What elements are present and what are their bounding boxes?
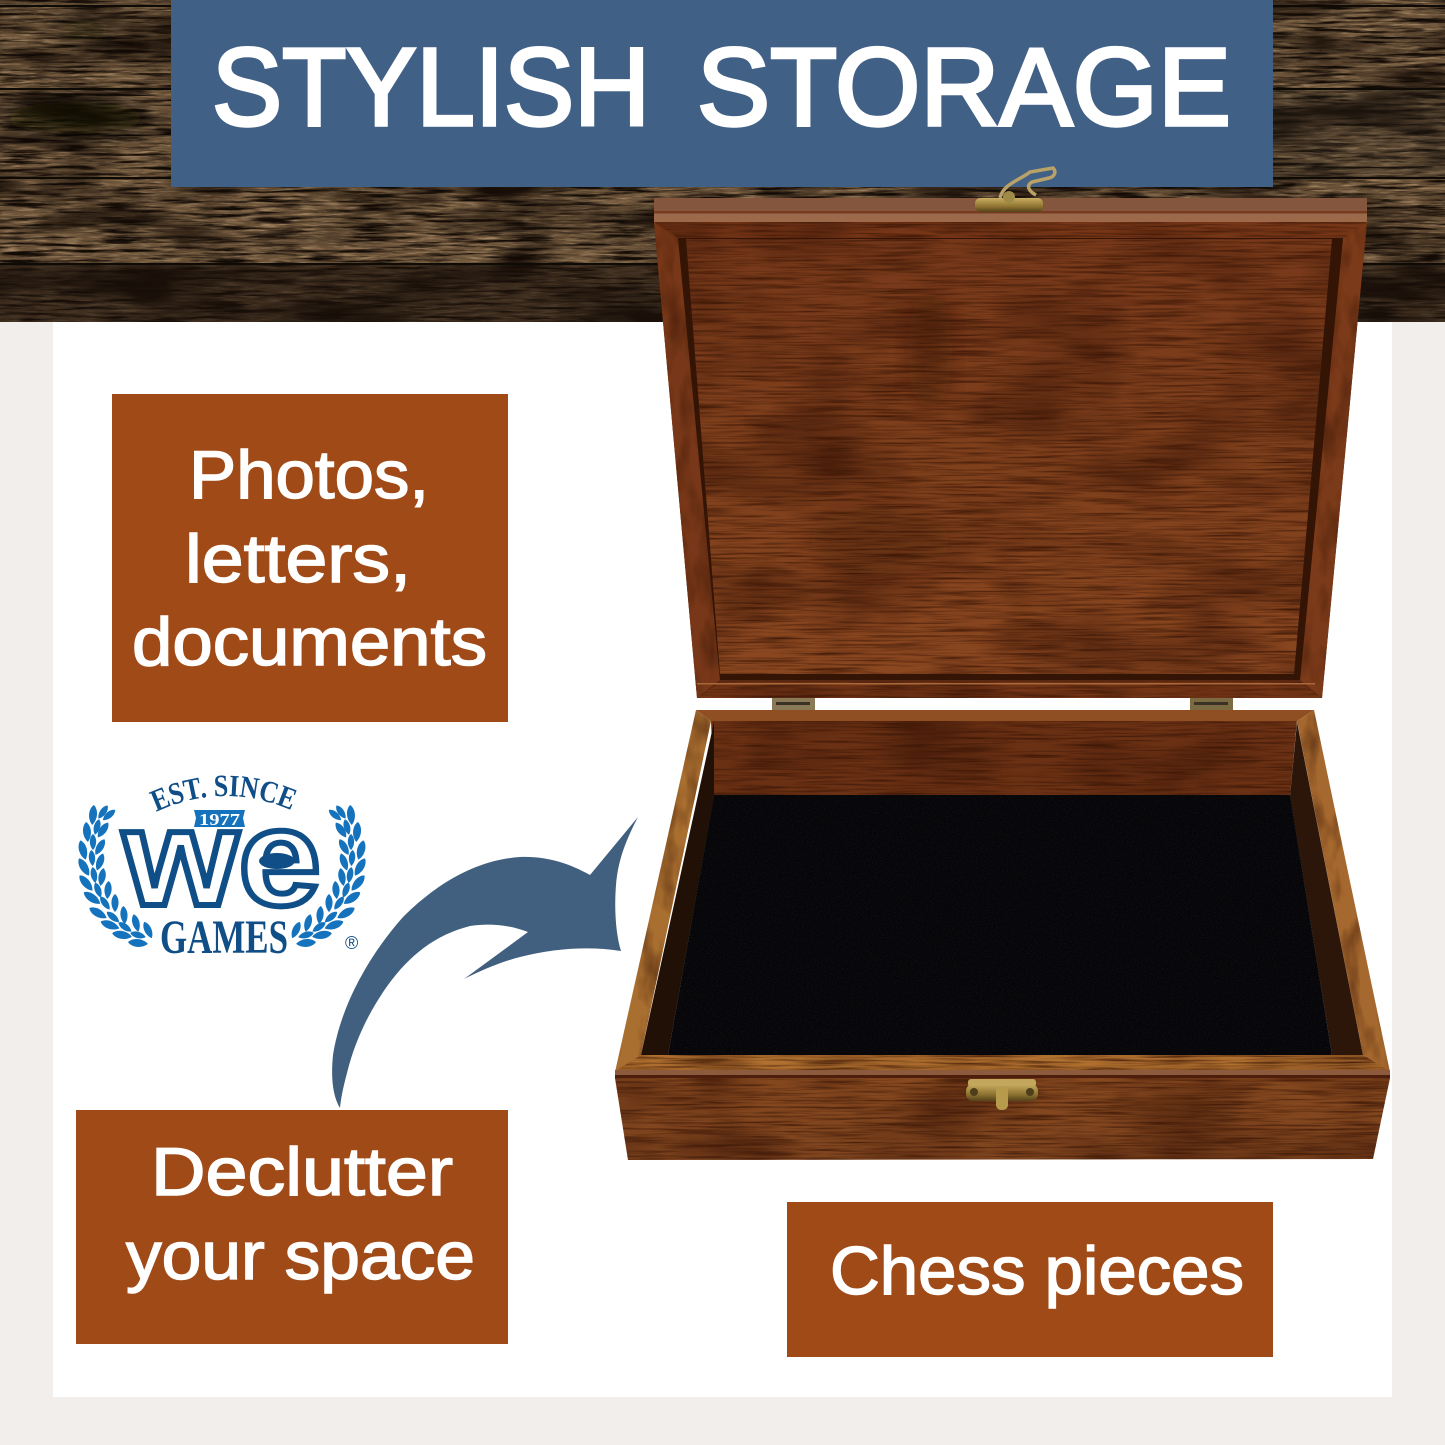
box base (615, 710, 1390, 1160)
right rim (1297, 710, 1390, 1072)
callout: chess pieces (787, 1202, 1273, 1357)
hinges (772, 698, 1233, 710)
title banner (171, 0, 1273, 187)
back rim (696, 710, 1314, 721)
logo year ribbon (194, 810, 245, 829)
arrow (332, 817, 638, 1108)
title: STYLISH (212, 26, 650, 149)
lid dark stain lower (810, 505, 950, 575)
lid top frame (654, 222, 1367, 238)
left rim (615, 710, 711, 1072)
lid inner panel (686, 239, 1332, 674)
callout: declutter your space: your space (126, 1218, 475, 1294)
callout: declutter your space: Declutter (151, 1134, 453, 1210)
front face (615, 1078, 1390, 1160)
front rim (617, 1055, 1388, 1070)
title: STORAGE (697, 26, 1231, 149)
lid bottom frame (697, 682, 1322, 698)
callout: declutter your space (76, 1110, 508, 1344)
top latch (975, 168, 1055, 212)
logo: WE Games (78, 776, 366, 964)
felt lining (668, 795, 1332, 1055)
lid dark stain (908, 290, 952, 410)
icon: left laurel (76, 804, 155, 948)
lid shadow lip (678, 238, 1343, 680)
lid left frame (654, 222, 720, 698)
logo tagline: EST. SINCE (148, 776, 297, 812)
callout: chess pieces: Chess pieces (830, 1233, 1244, 1309)
wood plank header (0, 0, 1445, 322)
logo name: GAMES (160, 911, 288, 964)
box lid (654, 168, 1367, 698)
callout: photos, letters, documents: Photos, (189, 437, 429, 513)
wooden box (615, 168, 1390, 1160)
registered mark: ® (345, 933, 358, 953)
panel: white content area (53, 322, 1392, 1397)
icon: right laurel (289, 804, 368, 948)
callout: photos, letters, documents: letters, (185, 521, 411, 597)
left inner wall (641, 722, 714, 1055)
back wall (711, 720, 1297, 796)
lid right frame (1300, 222, 1367, 698)
callout: photos, letters, documents (112, 394, 508, 722)
front hasp (966, 1079, 1038, 1110)
title (212, 26, 1231, 149)
callout: photos, letters, documents: documents (132, 604, 487, 680)
logo e counter (259, 853, 295, 869)
right inner wall (1290, 722, 1363, 1055)
logo wordmark: we (122, 781, 321, 935)
logo year ribbon: 1977 (199, 810, 241, 829)
